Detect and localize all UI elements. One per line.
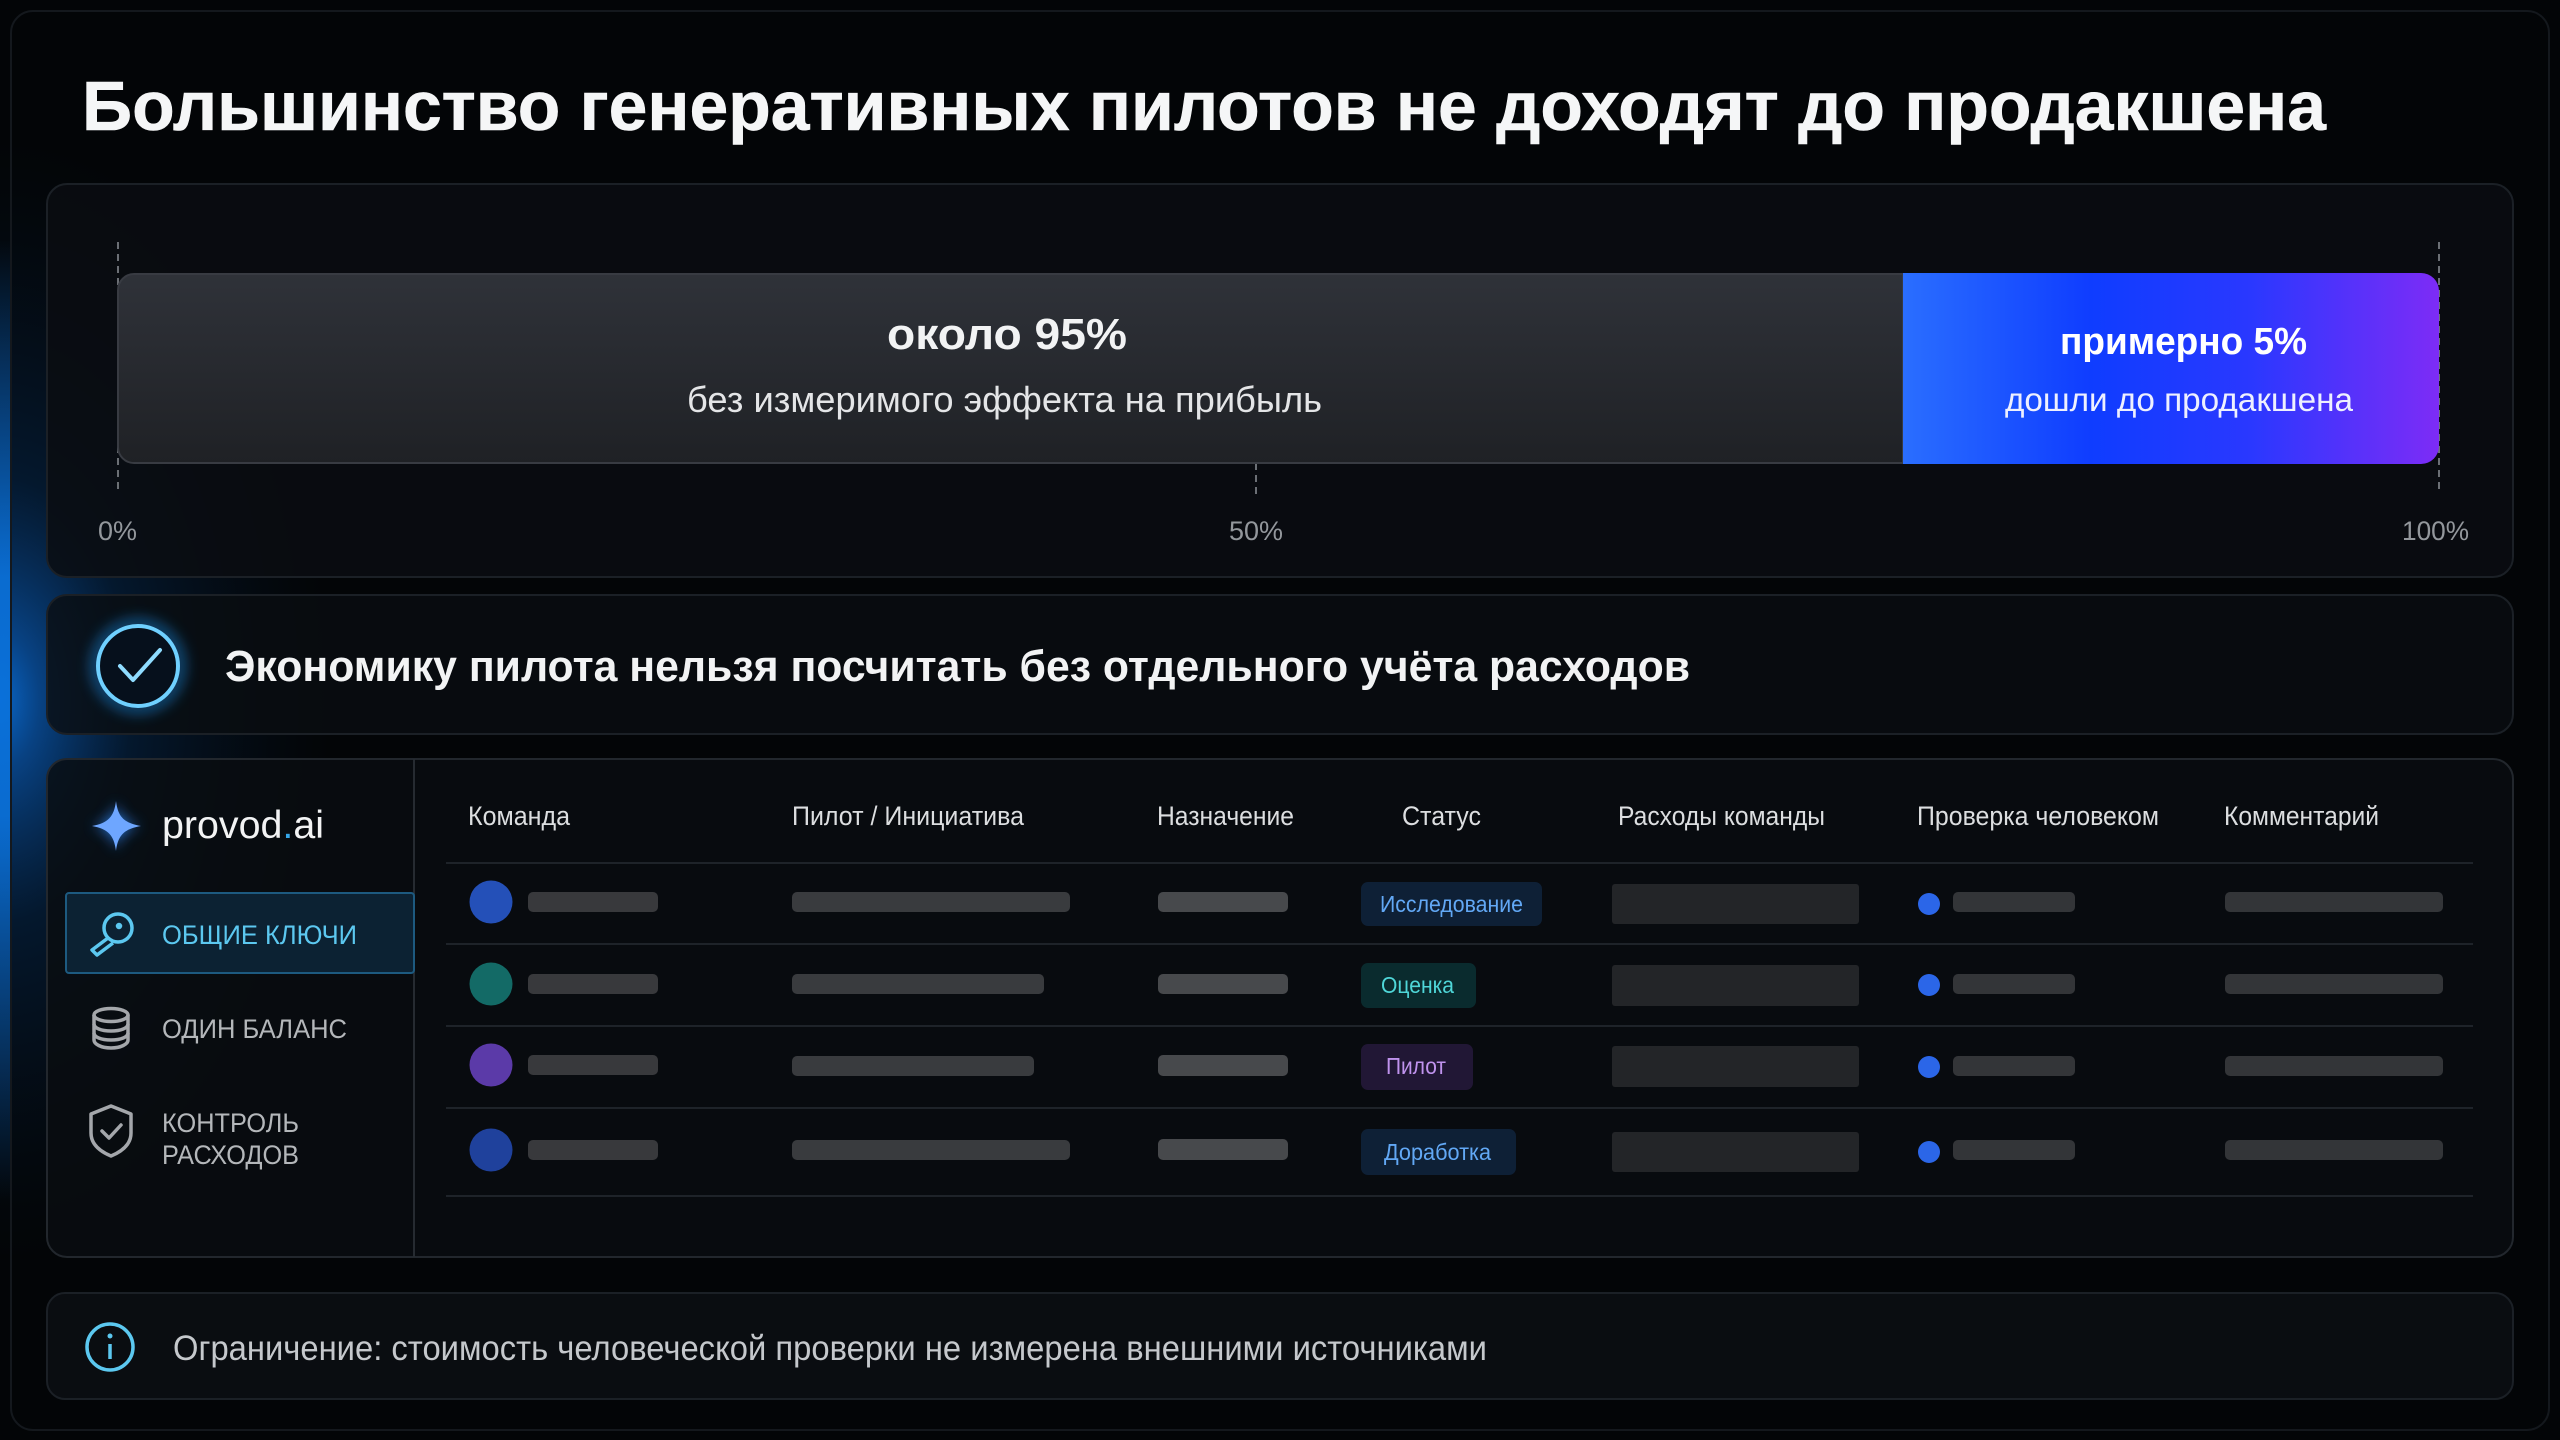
bar segment: about 95%: около 95% (887, 310, 1127, 359)
status pill (1361, 1044, 1473, 1090)
nav item: cost control: РАСХОДОВ (162, 1140, 299, 1170)
icon: check circle (96, 624, 180, 708)
bar segment: about 95% (118, 274, 1903, 463)
callout text: Экономику пилота нельзя посчитать без отдельного учёта расходов (225, 642, 1690, 691)
nav item: one balance: ОДИН БАЛАНС (162, 1014, 347, 1044)
nav item: cost control: КОНТРОЛЬ (162, 1108, 299, 1138)
table row 2 (470, 962, 2443, 1008)
table header: Статус (1402, 801, 1481, 831)
status pill: Исследование (1380, 891, 1523, 917)
table header: Комментарий (2224, 801, 2379, 831)
left blue glow (0, 120, 360, 1260)
table header: Проверка человеком (1917, 801, 2159, 831)
limitation text: Ограничение: стоимость человеческой проверки не измерена внешними источниками (173, 1329, 1487, 1368)
panel: product UI (47, 759, 2513, 1257)
table header: Пилот / Инициатива (792, 801, 1025, 831)
nav item: shared keys (active): ОБЩИЕ КЛЮЧИ (162, 920, 357, 950)
axis labels: 50% (1229, 516, 1283, 546)
axis ticks (118, 242, 2439, 494)
sidebar (66, 801, 414, 1170)
title: Большинство генеративных пилотов не доходят до продакшена (82, 67, 2327, 145)
nav item: one balance (94, 1008, 347, 1048)
axis labels (98, 516, 2469, 546)
axis labels: 100% (2402, 516, 2469, 546)
logo (92, 801, 324, 851)
bar segment: about 5%: дошли до продакшена (2005, 381, 2354, 418)
nav item: shared keys (active) (66, 893, 414, 973)
axis labels: 0% (98, 516, 137, 546)
status pill (1361, 963, 1476, 1008)
table header: Команда (468, 801, 571, 831)
table row 1 (470, 880, 2443, 926)
bar segment: about 5%: примерно 5% (2060, 321, 2307, 363)
status pill: Пилот (1386, 1053, 1446, 1079)
panel: limitation note (47, 1293, 2513, 1399)
panel: stacked 95/5 bar chart (47, 184, 2513, 577)
panel: callout (47, 595, 2513, 734)
bar segment: about 95%: без измеримого эффекта на прибыль (687, 379, 1322, 420)
table header: Назначение (1157, 801, 1294, 831)
table row 3 (470, 1044, 2443, 1090)
logo: provod.ai (162, 804, 324, 847)
table header (468, 801, 2379, 831)
status pill (1361, 1129, 1516, 1175)
table header: Расходы команды (1618, 801, 1825, 831)
icon: info (87, 1324, 133, 1370)
bar segment: about 5% (1903, 273, 2439, 464)
status pill (1361, 882, 1542, 926)
table row 4 (470, 1128, 2443, 1175)
status pill: Доработка (1384, 1139, 1491, 1165)
nav item: cost control (91, 1106, 299, 1170)
status pill: Оценка (1381, 972, 1454, 998)
